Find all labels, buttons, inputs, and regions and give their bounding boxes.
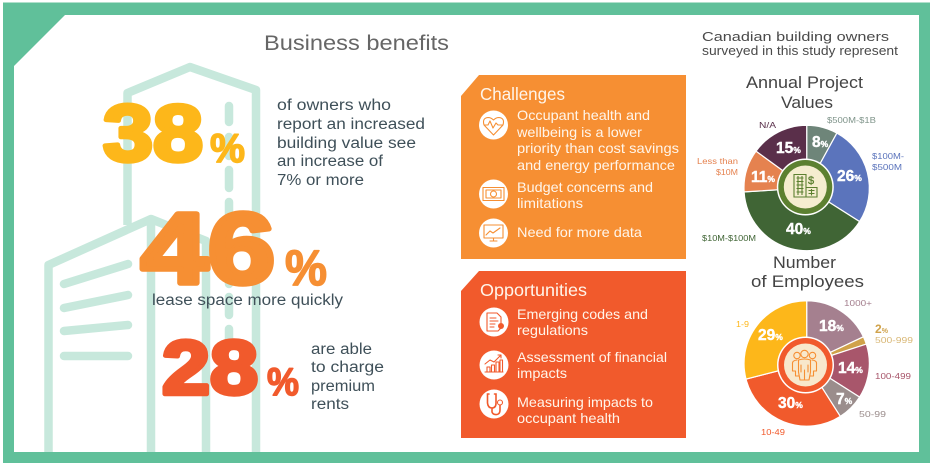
pie values: project values: 8%	[812, 134, 829, 151]
icon: buildings with dollar sign: $	[808, 175, 814, 187]
stat: 38 percent: 38	[103, 88, 203, 178]
stat: 38 percent: %	[210, 125, 245, 171]
heading: annual project values: Annual Project	[746, 73, 863, 92]
text: 28 percent description: are able	[311, 341, 372, 358]
pie labels: employees: 1000+	[844, 298, 872, 308]
stat: 28 percent	[162, 326, 299, 411]
text: financial impacts: Assessment of financial	[517, 349, 667, 365]
panel: challenges	[461, 75, 686, 259]
icon: monitor with chart	[479, 218, 508, 248]
pie labels: project values: $500M	[872, 162, 902, 172]
pie labels: employees: 10-49	[761, 427, 785, 437]
icon: stethoscope	[480, 390, 508, 418]
text: 38 percent description: building value see	[277, 135, 416, 152]
icon: banknote	[479, 180, 508, 208]
text: financial impacts: impacts	[517, 365, 567, 381]
text: budget: limitations	[517, 195, 583, 211]
pie labels: project values	[697, 115, 904, 243]
heading: business benefits: Business benefits	[264, 32, 449, 55]
pie values: project values: 26%	[837, 168, 862, 185]
heading: number of employees: Number	[773, 253, 836, 272]
text: survey intro: Canadian building owners	[702, 30, 889, 44]
text: measuring impacts: occupant health	[517, 410, 620, 426]
pie values: employees: 14%	[838, 360, 863, 377]
pie values: project values: 40%	[786, 221, 811, 238]
pie chart: annual project values	[744, 125, 869, 251]
icon: group of people	[777, 336, 834, 394]
text: emerging codes: Emerging codes and	[517, 306, 648, 322]
text: 38 percent description: of owners who	[277, 97, 391, 114]
heading: challenges: Challenges	[480, 84, 565, 104]
pie values: project values: 11%	[751, 169, 775, 186]
text: 28 percent description: rents	[311, 396, 349, 413]
text: need for more data: Need for more data	[517, 224, 642, 240]
text: 28 percent description: to charge	[311, 359, 384, 376]
pie labels: project values: $10M	[716, 167, 738, 177]
pie values: employees: 18%	[819, 318, 844, 335]
text: occupant health	[516, 107, 679, 173]
text: emerging codes: regulations	[517, 322, 588, 338]
background building illustration	[48, 67, 256, 452]
pie values: employees: 30%	[778, 395, 803, 412]
panel: opportunities	[461, 271, 686, 438]
icon: bars and rising arrow	[480, 350, 508, 380]
icon: document with check	[480, 308, 508, 336]
pie labels: employees: 2%	[875, 322, 889, 336]
stat: 46 percent: 46	[141, 193, 275, 305]
text: emerging codes	[517, 306, 648, 338]
pie labels: project values: $100M-	[872, 151, 904, 161]
heading: annual project values: Values	[781, 93, 833, 112]
heading: number of employees	[751, 253, 864, 291]
heading: annual project values	[746, 73, 863, 112]
text: measuring impacts	[517, 394, 653, 426]
pie chart: number of employees	[744, 301, 869, 426]
pie labels: employees: 500-999	[875, 335, 913, 345]
text: occupant health: and energy performance	[517, 157, 675, 173]
text: survey intro	[702, 30, 899, 58]
text: budget	[517, 179, 653, 211]
pie values: project values: 15%	[776, 140, 801, 157]
pie labels: employees: 50-99	[859, 409, 886, 419]
pie values: employees: 29%	[758, 327, 783, 344]
stat: 28 percent: 28	[162, 326, 258, 411]
text: 38 percent description: 7% or more	[277, 172, 364, 189]
text: measuring impacts: Measuring impacts to	[517, 394, 653, 410]
pie labels: project values: Less than	[697, 156, 738, 166]
heading: opportunities: Opportunities	[480, 280, 587, 300]
pie labels: project values: $500M-$1B	[827, 115, 876, 125]
pie labels: project values: N/A	[759, 120, 776, 130]
stat: 46 percent	[141, 193, 327, 305]
heading: number of employees: of Employees	[751, 272, 864, 291]
pie values: employees: 7%	[836, 391, 853, 408]
icon: heart with pulse	[479, 110, 508, 140]
text: financial impacts	[517, 349, 667, 381]
text: 38 percent description	[277, 97, 425, 189]
text: occupant health: priority than cost savings	[517, 140, 679, 156]
pie labels: employees: 100-499	[875, 371, 911, 381]
text: 28 percent description: premium	[311, 378, 375, 395]
icon: buildings with dollar sign	[777, 158, 834, 216]
text: survey intro: surveyed in this study represent	[702, 44, 899, 58]
text: occupant health: wellbeing is a lower	[516, 124, 642, 140]
pie labels: employees	[736, 298, 913, 437]
pie labels: employees: 1-9	[736, 319, 749, 329]
text: 28 percent description	[311, 341, 384, 413]
pie labels: project values: $10M-$100M	[702, 233, 756, 243]
stat: 46 percent: %	[285, 240, 327, 296]
text: budget: Budget concerns and	[517, 179, 653, 195]
text: 38 percent description: report an increased	[277, 116, 425, 133]
pie values: employees	[758, 318, 863, 412]
stat: 28 percent: %	[267, 361, 299, 404]
text: 46 percent description: lease space more quickly	[152, 292, 343, 309]
text: occupant health: Occupant health and	[517, 107, 650, 123]
text: 38 percent description: an increase of	[277, 153, 384, 170]
pie values: project values	[751, 134, 862, 238]
stat: 38 percent	[103, 88, 245, 178]
